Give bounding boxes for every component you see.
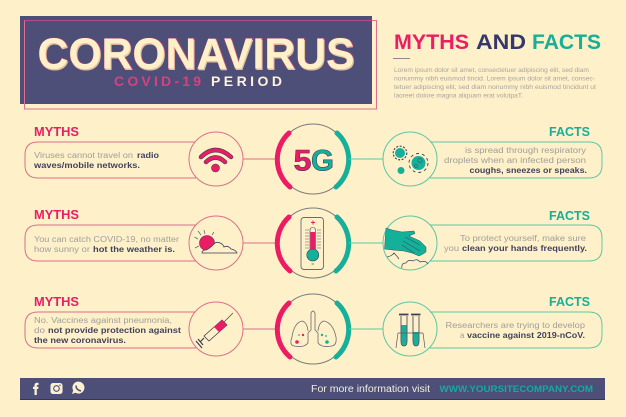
connector: row 3 myth to center (243, 328, 277, 330)
icon: hands under water (383, 216, 437, 270)
panel: row 1 myth: Viruses cannot travel on (34, 151, 133, 160)
panel: row 1 myth: MYTHS (34, 124, 79, 139)
panel: row 3 myth (25, 294, 196, 348)
title banner: PERIOD (211, 73, 282, 89)
panel: row 3 myth: do (34, 326, 46, 335)
panel: row 3 myth: No. Vaccines against pneumonia, (34, 316, 172, 325)
intro text block: Lorem ipsum dolor sit amet, consectetuer adipiscing elit, sed diam (394, 67, 589, 74)
intro text block (394, 67, 596, 100)
panel: row 2 fact: To protect yourself, make sure (460, 234, 587, 243)
panel: row 2 fact: FACTS (549, 208, 590, 223)
panel: row 1 myth: waves/mobile networks. (33, 161, 140, 170)
footer bar: For more information visit (311, 384, 430, 395)
center ring: 5G (277, 124, 349, 194)
icon: whatsapp (72, 382, 84, 394)
panel: row 3 myth: the new coronavirus. (34, 336, 126, 345)
panel: row 3 fact (430, 294, 602, 348)
panel: row 2 fact: you (444, 244, 459, 253)
panel: row 1 myth: radio (137, 151, 159, 160)
panel: row 3 fact: vaccine against 2019-nCoV. (467, 331, 585, 340)
heading: myths and facts: MYTHS (394, 31, 469, 54)
center ring: thermometer (277, 208, 349, 278)
heading: myths and facts: FACTS (532, 31, 601, 54)
intro text block: tetuer adipiscing elit, sed diam nonummy nibh euismod tincidunt ut (394, 84, 596, 91)
title banner: COVID-19 (114, 73, 201, 89)
connector: row 2 myth to center (243, 242, 277, 244)
connector: center to row 1 fact (349, 158, 383, 160)
panel: row 1 fact (430, 124, 602, 178)
heading: myths and facts: AND (476, 31, 526, 54)
panel: row 1 fact: droplets when an infected person (444, 156, 586, 165)
panel: row 3 myth: not provide protection against (48, 326, 181, 335)
center ring: 5G: G (311, 144, 334, 178)
icon: test tubes (383, 302, 437, 356)
connector: row 1 myth to center (243, 158, 277, 160)
panel: row 2 fact: clean your hands frequently. (462, 244, 587, 253)
panel: row 3 fact: Researchers are trying to develop (446, 321, 586, 330)
panel: row 1 fact: coughs, sneezes or speaks. (470, 166, 587, 175)
center ring: lungs (277, 294, 349, 364)
footer bar: WWW.YOURSITECOMPANY.COM (440, 384, 593, 394)
panel: row 2 myth: MYTHS (34, 207, 79, 222)
panel: row 2 myth (25, 207, 196, 261)
panel: row 2 myth: You can catch COVID-19, no matter (34, 235, 179, 244)
connector: center to row 3 fact (349, 328, 383, 330)
intro text block: nonummy nibh euismod tincid. Lorem ipsum dolor sit amet, consec- (394, 76, 595, 82)
panel: row 3 fact: FACTS (549, 294, 590, 309)
panel: row 1 fact: FACTS (549, 124, 590, 139)
panel: row 2 myth: how sunny or (34, 245, 90, 254)
heading: myths and facts (393, 31, 601, 59)
panel: row 1 myth (25, 124, 196, 178)
title banner: CORONAVIRUS (38, 30, 354, 78)
panel: row 2 fact (430, 208, 602, 261)
title banner: CORONAVIRUS (38, 30, 355, 79)
icon: sun behind cloud (189, 216, 243, 270)
connector: center to row 2 fact (349, 242, 383, 244)
intro text block: laoreet dolore magna aliquam erat volutpaT. (394, 92, 523, 100)
icon: virus particles (383, 132, 437, 186)
icon: instagram (50, 383, 62, 394)
center ring: 5G: 5 (294, 144, 312, 178)
icon: facebook (33, 383, 38, 395)
title banner (20, 16, 376, 109)
panel: row 3 myth: MYTHS (34, 294, 79, 309)
icon: wifi (189, 132, 243, 186)
panel: row 1 fact: is spread through respiratory (465, 146, 586, 155)
panel: row 3 fact: a (460, 331, 465, 340)
footer bar (20, 378, 605, 400)
icon: syringe (189, 302, 243, 356)
panel: row 2 myth: hot the weather is. (93, 245, 175, 254)
title banner: CORONAVIRUS (38, 31, 356, 80)
